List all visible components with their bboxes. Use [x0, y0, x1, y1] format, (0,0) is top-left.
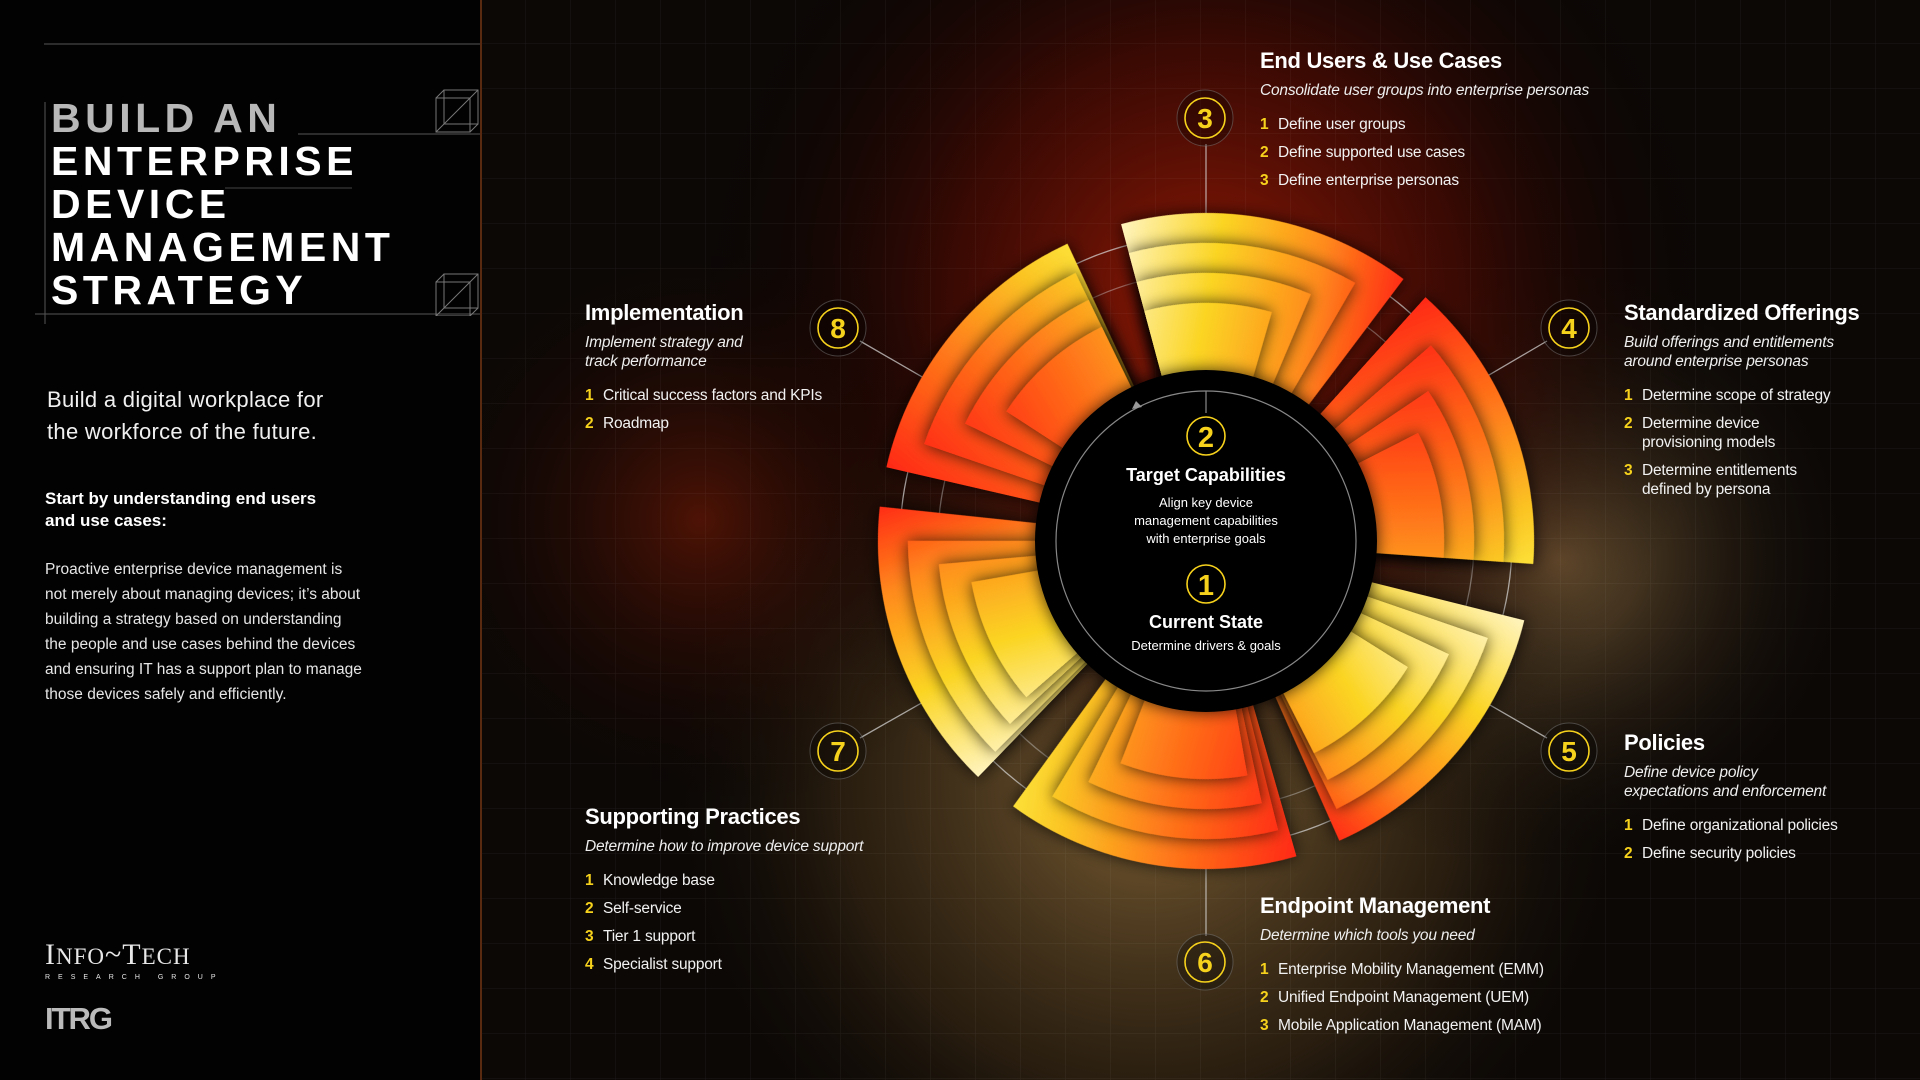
block: Supporting Practices: 1	[585, 872, 593, 889]
block: Standardized Offerings: provisioning models	[1642, 434, 1775, 451]
block: Policies: Define organizational policies	[1642, 817, 1838, 834]
block: Supporting Practices	[585, 804, 864, 973]
wheel diagram: management capabilities	[1134, 513, 1278, 528]
block: Supporting Practices: 4	[585, 956, 593, 973]
wheel diagram: 1	[1198, 570, 1214, 602]
block: Endpoint Management: 3	[1260, 1017, 1268, 1034]
block: Implementation: 1	[585, 387, 593, 404]
block: Policies: Policies	[1624, 730, 1705, 755]
segment group 3	[1121, 157, 1432, 452]
logo: Info-Tech: RESEARCH GROUP	[45, 974, 224, 981]
node badges: 6	[1197, 947, 1213, 978]
block: Standardized Offerings: 2	[1624, 415, 1632, 432]
logo: Info-Tech: INFO~TECH	[45, 938, 191, 971]
block: Policies: expectations and enforcement	[1624, 783, 1826, 800]
block: Supporting Practices: Knowledge base	[603, 872, 715, 889]
block: Standardized Offerings: Determine device	[1642, 415, 1759, 432]
center badges	[1187, 417, 1225, 603]
block: Standardized Offerings: around enterprise personas	[1624, 353, 1808, 370]
node badges	[810, 90, 1597, 990]
paragraph: not merely about managing devices; it’s about	[45, 586, 360, 603]
logo: Info-Tech	[45, 938, 224, 981]
block: Implementation: track performance	[585, 353, 707, 370]
wheel diagram: Align key device	[1159, 495, 1253, 510]
title: DEVICE	[51, 181, 231, 227]
block: Policies: 2	[1624, 845, 1632, 862]
node badges: 8	[830, 313, 846, 344]
tagline: the workforce of the future.	[47, 419, 317, 444]
paragraph: Proactive enterprise device management is	[45, 561, 342, 578]
tagline: Build a digital workplace for	[47, 387, 324, 412]
block: End Users & Use Cases: 3	[1260, 172, 1268, 189]
block: Policies: Define device policy	[1624, 764, 1758, 781]
block: Standardized Offerings: 1	[1624, 387, 1632, 404]
block: End Users & Use Cases: Consolidate user groups into enterprise personas	[1260, 82, 1589, 99]
block: Endpoint Management: 1	[1260, 961, 1268, 978]
block: Endpoint Management: Endpoint Management	[1260, 893, 1490, 918]
wheel diagram: Target Capabilities	[1126, 465, 1286, 485]
block: End Users & Use Cases: 1	[1260, 116, 1268, 133]
block: End Users & Use Cases: Define supported use cases	[1278, 144, 1465, 161]
block: Supporting Practices: Tier 1 support	[603, 928, 695, 945]
paragraph: and ensuring IT has a support plan to manage	[45, 661, 362, 678]
block: Implementation	[585, 300, 822, 432]
node badges: 7	[830, 736, 846, 767]
segment group 7	[792, 428, 1142, 777]
wheel diagram: Current State	[1149, 612, 1263, 632]
block: Supporting Practices: 3	[585, 928, 593, 945]
block: Supporting Practices: 2	[585, 900, 593, 917]
block: Implementation: Implementation	[585, 300, 743, 325]
block: Supporting Practices: Self-service	[603, 900, 682, 917]
block: Implementation: Roadmap	[603, 415, 669, 432]
icon: wireframe cubes	[436, 90, 478, 316]
logo: ITRG: ITRG	[45, 1001, 111, 1036]
block: Endpoint Management	[1260, 893, 1544, 1034]
block: Implementation: 2	[585, 415, 593, 432]
block: End Users & Use Cases: Define enterprise personas	[1278, 172, 1459, 189]
node badges: 5	[1561, 736, 1577, 767]
wheel diagram: with enterprise goals	[1145, 531, 1266, 546]
wheel diagram: 2	[1198, 422, 1214, 454]
tagline	[47, 387, 324, 444]
block: Endpoint Management: 2	[1260, 989, 1268, 1006]
paragraph: the people and use cases behind the devices	[45, 636, 355, 653]
block: Policies: Define security policies	[1642, 845, 1796, 862]
block: Standardized Offerings: Standardized Offerings	[1624, 300, 1859, 325]
block: Endpoint Management: Determine which tools you need	[1260, 927, 1475, 944]
title: MANAGEMENT	[51, 224, 394, 270]
block: Endpoint Management: Mobile Application Management (MAM)	[1278, 1017, 1542, 1034]
segment group 6	[983, 630, 1296, 928]
block: Supporting Practices: Determine how to improve device support	[585, 838, 863, 855]
node badges: 3	[1197, 103, 1213, 134]
title: STRATEGY	[51, 267, 307, 313]
subheading: Start by understanding end users	[45, 489, 316, 508]
block: Standardized Offerings: Build offerings and entitlements	[1624, 334, 1834, 351]
segment group 8	[886, 215, 1174, 520]
wheel diagram: Determine drivers & goals	[1131, 638, 1281, 653]
segment group 5	[1233, 563, 1524, 871]
block: Implementation: Implement strategy and	[585, 334, 743, 351]
block: Standardized Offerings: Determine entitlements	[1642, 462, 1797, 479]
subheading: and use cases:	[45, 511, 167, 530]
block: Endpoint Management: Unified Endpoint Management (UEM)	[1278, 989, 1529, 1006]
block: Standardized Offerings: defined by persona	[1642, 481, 1770, 498]
title: ENTERPRISE	[51, 138, 358, 184]
block: Standardized Offerings: Determine scope of strategy	[1642, 387, 1830, 404]
block: Policies	[1624, 730, 1838, 862]
paragraph: those devices safely and efficiently.	[45, 686, 287, 703]
block: Standardized Offerings: 3	[1624, 462, 1632, 479]
block: Implementation: Critical success factors and KPIs	[603, 387, 822, 404]
center circle	[1035, 370, 1377, 712]
block: Supporting Practices: Supporting Practices	[585, 804, 800, 829]
block: Policies: 1	[1624, 817, 1632, 834]
paragraph: building a strategy based on understanding	[45, 611, 341, 628]
title	[51, 95, 394, 313]
paragraph	[45, 561, 362, 703]
block: End Users & Use Cases	[1260, 48, 1589, 189]
block: Endpoint Management: Enterprise Mobility Management (EMM)	[1278, 961, 1544, 978]
connector lines and rings	[860, 144, 1547, 936]
node badges: 4	[1561, 313, 1577, 344]
block: Supporting Practices: Specialist support	[603, 956, 722, 973]
block: Standardized Offerings	[1624, 300, 1859, 498]
block: End Users & Use Cases: 2	[1260, 144, 1268, 161]
subheading	[45, 489, 316, 530]
segment group 4	[1268, 297, 1618, 645]
block: End Users & Use Cases: Define user groups	[1278, 116, 1405, 133]
block: End Users & Use Cases: End Users & Use Cases	[1260, 48, 1502, 73]
title: BUILD AN	[51, 95, 281, 141]
